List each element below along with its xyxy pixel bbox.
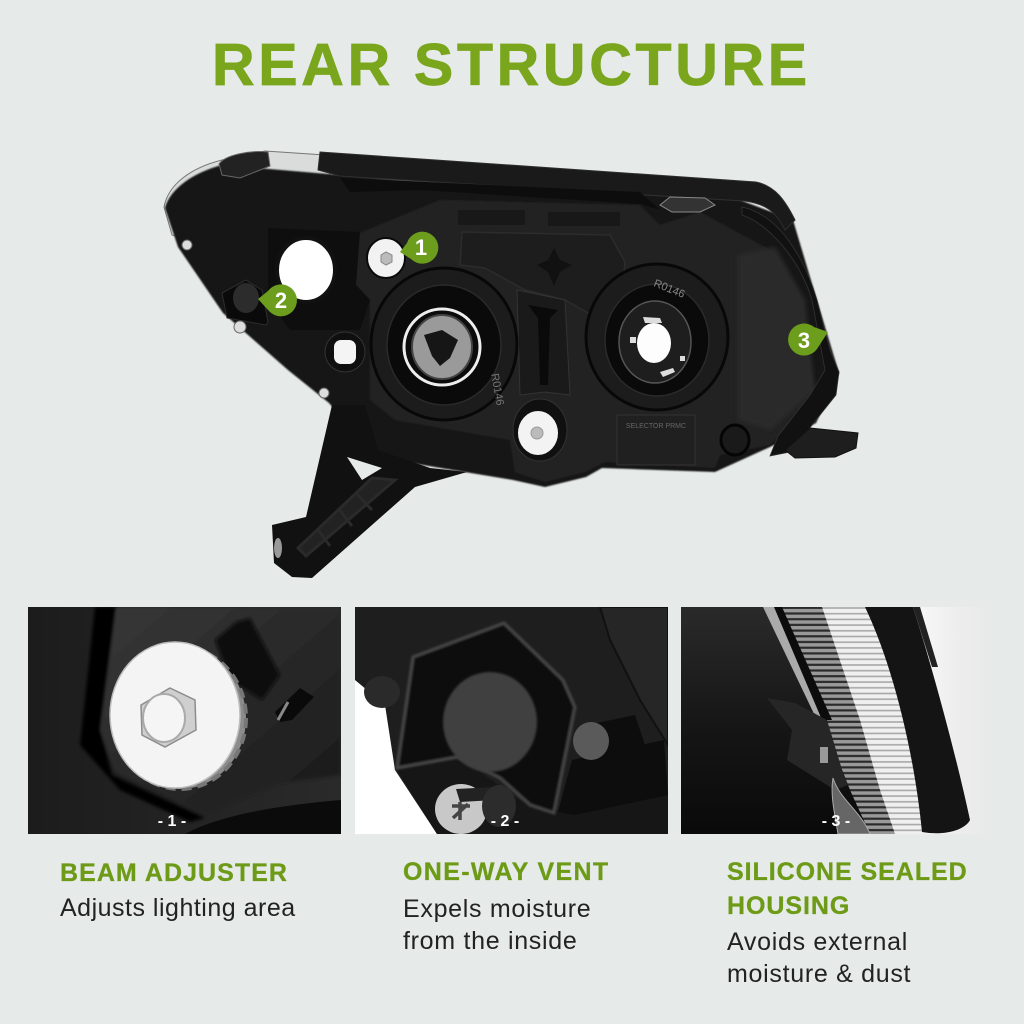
side plug [573, 715, 645, 760]
washer [110, 642, 240, 788]
inner ring [605, 284, 709, 396]
vent cap [443, 672, 537, 772]
screw head [435, 784, 487, 834]
feature 3 heading [727, 858, 968, 920]
white background wedge [355, 680, 437, 834]
feature 2 description: from the inside [403, 927, 577, 955]
hex nut [141, 688, 196, 747]
cross mark [537, 248, 572, 286]
adjuster nut [381, 252, 392, 265]
pin highlight [278, 702, 288, 720]
panel 3: sealed housing photo [681, 607, 970, 834]
clear fins [820, 607, 930, 834]
reflector ring [619, 301, 691, 383]
feature 2 heading: ONE-WAY VENT [403, 858, 610, 886]
black rail [865, 607, 970, 833]
lower left bracket [272, 405, 467, 578]
vent housing [397, 623, 575, 813]
lower right mount [785, 428, 858, 458]
right lamp edge [600, 607, 668, 745]
feature 3 description [727, 928, 911, 988]
caption 3: - 3 - [822, 813, 850, 830]
dark left cavity [268, 228, 370, 330]
lower body [397, 757, 668, 834]
marker number: 2 [275, 288, 287, 313]
screw bracket [319, 388, 329, 398]
raised bracket [100, 607, 341, 813]
socket ring [513, 399, 567, 461]
marker shape [258, 284, 297, 316]
right side panel [738, 247, 815, 430]
plug shaft [592, 715, 645, 760]
screws [182, 240, 329, 398]
panel 2: one-way vent photo [355, 607, 668, 834]
dark strip [774, 607, 832, 720]
adjuster washer [367, 238, 405, 278]
feature 1 description: Adjusts lighting area [60, 894, 296, 922]
bright reflector marks [630, 317, 685, 377]
panel background [28, 607, 341, 834]
housing centre panel [355, 200, 815, 482]
plug head [482, 785, 516, 827]
left lamp socket [371, 268, 517, 420]
marker number: 1 [415, 235, 427, 260]
body right [558, 740, 668, 815]
vent cap [233, 283, 259, 313]
socket glass [334, 340, 356, 364]
silver edge strip [763, 607, 826, 718]
label plate [617, 415, 695, 465]
bracket gap [347, 457, 382, 480]
feature 1 heading: BEAM ADJUSTER [60, 859, 288, 887]
seal clip [820, 747, 828, 763]
illustration: headlight rear view [164, 150, 859, 578]
phillips slot [452, 802, 470, 820]
dark fins [780, 607, 895, 834]
lower lens edge [832, 778, 870, 834]
centre raised panel [460, 232, 625, 330]
caption 1: - 1 - [158, 813, 186, 830]
feature 3 description: Avoids external [727, 928, 908, 956]
rubber seal [586, 264, 728, 410]
plug face [573, 722, 609, 760]
vent housing [222, 280, 268, 325]
lens edge [164, 151, 330, 240]
housing body [165, 165, 839, 487]
beam adjuster [367, 238, 405, 278]
marker 2 [258, 284, 297, 316]
rib slot [528, 305, 558, 385]
socket nut [531, 427, 543, 439]
reflector [412, 315, 472, 379]
lower dark recess [185, 800, 341, 834]
panel background [355, 607, 668, 834]
lens lip [364, 676, 400, 708]
feature 2 description: Expels moisture [403, 895, 591, 923]
top vent slots [458, 210, 620, 226]
seal block [767, 698, 848, 790]
rear block [215, 618, 280, 700]
top left bracket [219, 152, 270, 178]
knurled wheel [114, 647, 246, 789]
marker 3 [788, 324, 828, 356]
screw shaft [456, 787, 495, 802]
screw [435, 784, 516, 834]
screw left [182, 240, 192, 250]
marker number: 3 [798, 328, 810, 353]
chrome ring [404, 309, 480, 385]
marker 1 [400, 232, 438, 264]
thin dark line [913, 607, 938, 667]
plate text: SELECTOR PRMC [626, 423, 686, 430]
feature 3 heading: SILICONE SEALED [727, 858, 968, 886]
screw lower [234, 321, 246, 333]
dark groove [80, 607, 205, 822]
bulb glass [637, 323, 671, 363]
part mark: R0146 [488, 372, 506, 406]
right lamp socket [586, 264, 728, 410]
lower vent cap [721, 425, 749, 455]
marker shape [400, 232, 438, 264]
feature 3 heading: HOUSING [727, 892, 850, 920]
nut face [143, 694, 185, 742]
title: REAR STRUCTURE [212, 32, 811, 98]
inner ring [387, 285, 501, 405]
small mount bolt [274, 538, 282, 558]
part mark: R0146 [652, 278, 686, 301]
caption 2: - 2 - [491, 813, 519, 830]
white bulb cap [277, 238, 335, 302]
panel 1: beam adjuster photo [28, 607, 341, 834]
feature 2 description [403, 895, 591, 955]
second rail [340, 178, 660, 210]
small bulb socket [325, 332, 365, 372]
rubber seal [371, 268, 517, 420]
top rail [318, 152, 795, 230]
bracket ribs [298, 478, 395, 556]
side pin [275, 688, 314, 722]
plate outline [617, 415, 695, 465]
panel background [681, 607, 995, 834]
side cable [742, 207, 839, 456]
one-way vent [222, 280, 268, 325]
feature 3 description: moisture & dust [727, 960, 911, 988]
socket cap [518, 411, 558, 455]
right clear lens [905, 607, 995, 834]
bulb hole [424, 330, 458, 366]
bottom bulb socket [513, 399, 567, 461]
socket ring [325, 332, 365, 372]
marker shape [788, 324, 828, 356]
centre rib [517, 290, 570, 395]
bracket hook right [660, 197, 715, 212]
